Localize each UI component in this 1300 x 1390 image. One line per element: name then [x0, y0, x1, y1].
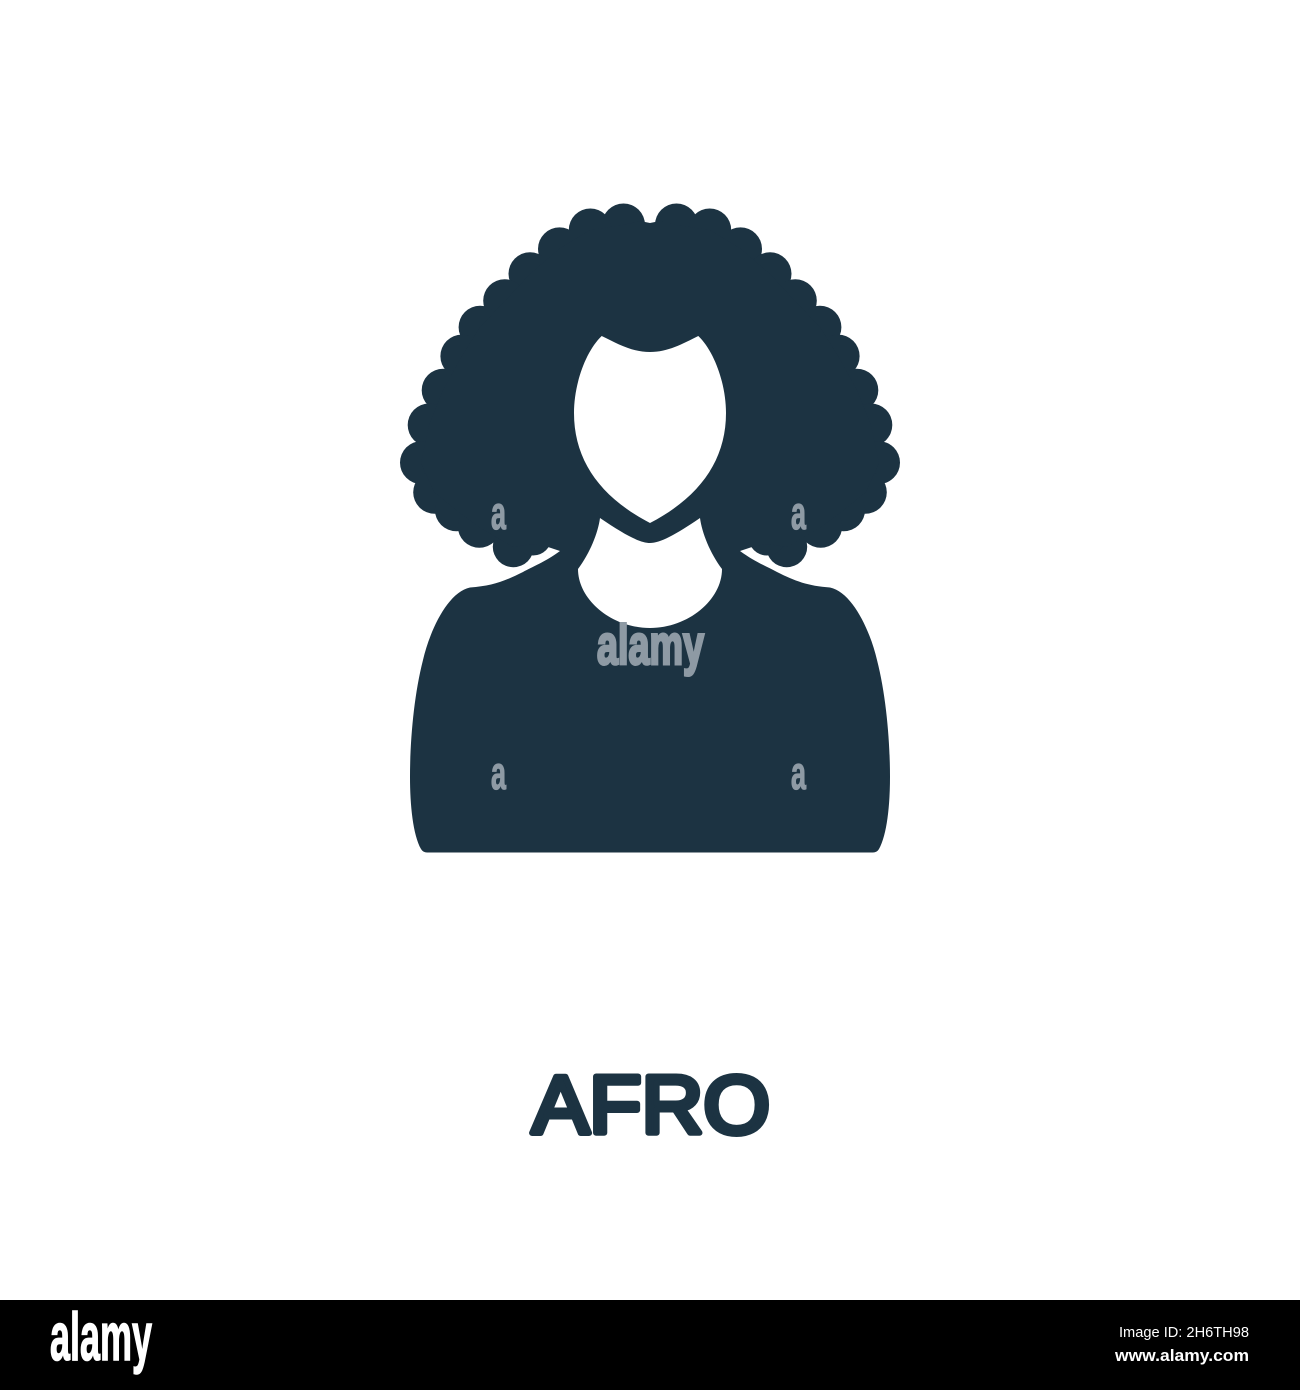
watermark: letter lower left: a: [491, 747, 506, 799]
footer bar: [0, 1299, 1300, 1390]
icon: neck: [578, 518, 722, 628]
watermark: letter upper left: a: [491, 487, 506, 539]
footer url: www.alamy.com: [1114, 1346, 1249, 1365]
icon: woman with afro hair: [400, 204, 900, 852]
footer logo: alamy: [50, 1299, 152, 1375]
watermark: letter lower right: a: [791, 747, 806, 799]
title: AFRO: [532, 1060, 770, 1151]
icon: shoulders and torso: [410, 551, 890, 852]
icon: afro hair: [400, 204, 900, 600]
watermark: alamy: [491, 487, 806, 799]
watermark: letter upper right: a: [791, 487, 806, 539]
icon: face: [574, 336, 726, 523]
watermark: center logo: alamy: [597, 613, 704, 676]
footer image id: Image ID: 2H6TH98: [1119, 1324, 1249, 1341]
